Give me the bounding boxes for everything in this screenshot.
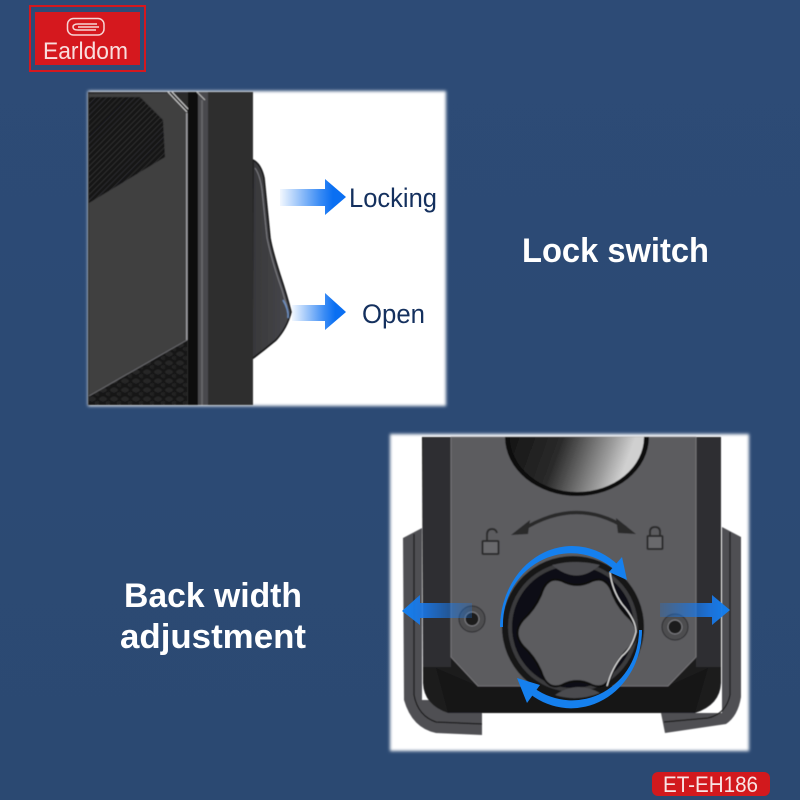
icon: closed padlock [648, 527, 662, 549]
screw left [459, 606, 485, 632]
arrow: expand left [402, 595, 472, 625]
icon: open padlock [482, 529, 498, 554]
model badge: ET-EH186 [663, 772, 758, 797]
heading: lock switch: Lock switch [522, 232, 709, 270]
logo wordmark: Earldom [43, 38, 128, 65]
heading: back width adjustment: Back width [124, 577, 302, 615]
panel: back width adjustment photo [388, 432, 752, 754]
lock lever [252, 160, 291, 359]
striped vent texture [89, 97, 165, 203]
main body [422, 437, 721, 713]
adjustment wheel [502, 556, 644, 698]
arrow: open [292, 293, 346, 330]
device side view [88, 92, 291, 405]
leather grip texture [89, 340, 187, 405]
label: Locking: Locking [349, 183, 437, 213]
rotation arrows [500, 546, 642, 708]
heading: back width adjustment [120, 577, 306, 656]
logo: Earldom [30, 6, 145, 71]
device back view [402, 436, 742, 736]
panel: lock switch photo [88, 91, 446, 406]
arrow: locking [280, 179, 346, 215]
panel background [390, 434, 749, 751]
heading: back width adjustment: adjustment [120, 618, 306, 656]
inner plate [451, 437, 696, 686]
screw right [662, 614, 688, 640]
icon: paperclip logo mark [68, 18, 104, 35]
top dial [504, 436, 650, 496]
side brackets [403, 528, 482, 735]
label: Open: Open [362, 299, 425, 329]
arrow: expand right [660, 595, 730, 625]
curved double arrow [511, 512, 636, 535]
panel background [88, 91, 446, 406]
